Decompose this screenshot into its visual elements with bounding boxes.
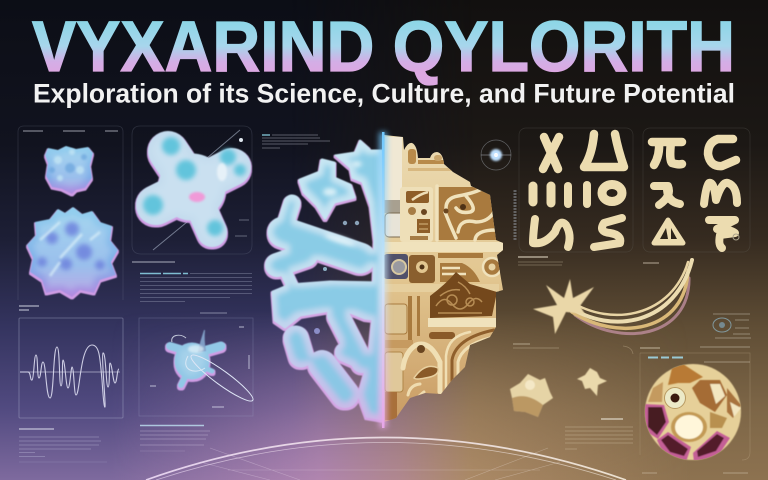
symbol row 1 (543, 134, 736, 169)
brain: blue organic half (273, 140, 384, 420)
title: VYXARIND QYLORITH (32, 8, 735, 87)
light horizontal bands (384, 242, 504, 327)
small gold crystals (510, 368, 607, 417)
patterned dark patch (430, 272, 497, 318)
panel: spiky molecules (18, 126, 123, 300)
panel: waveform chart (19, 306, 123, 418)
icon: large molecule (27, 207, 118, 297)
cell left (400, 187, 433, 242)
symbol row 2 (533, 183, 737, 205)
HUD data readout (700, 314, 751, 347)
icon: glowing star (481, 140, 511, 170)
dome grid (146, 438, 626, 480)
icon: faceted gold sphere (644, 364, 741, 462)
text block under crystals (513, 344, 633, 449)
icon: star and swoosh (533, 260, 692, 334)
brain: gold circuit half (384, 130, 506, 425)
vertical label and culture caption (515, 190, 659, 265)
panel: branched molecule (132, 126, 252, 254)
panel: glyph symbols (519, 128, 750, 252)
right column (335, 140, 384, 420)
panel: orbit molecule (139, 313, 257, 416)
icon: small molecule (45, 146, 93, 194)
lower curved circuit (385, 296, 455, 420)
icon: gold crystal large (510, 374, 553, 417)
icon: orbit molecule (170, 330, 257, 406)
lower row of nodes (384, 253, 501, 283)
text block under orbit molecule (140, 426, 210, 451)
top cream blocks and cells (384, 137, 497, 242)
waveform line (20, 345, 119, 407)
caption and text block under branched molecule (132, 262, 252, 302)
panel: gold sphere (640, 348, 750, 473)
icon: gold crystal small (577, 368, 607, 396)
text block under waveform (19, 429, 107, 462)
cell right (438, 187, 497, 240)
text block beside brain (262, 135, 330, 148)
central divider line (379, 132, 387, 428)
icon: branched molecule (143, 137, 246, 236)
symbol row 3 (533, 218, 735, 248)
subtitle: Exploration of its Science, Culture, and Future Potential (33, 78, 735, 108)
cream circuit traces (437, 186, 496, 240)
